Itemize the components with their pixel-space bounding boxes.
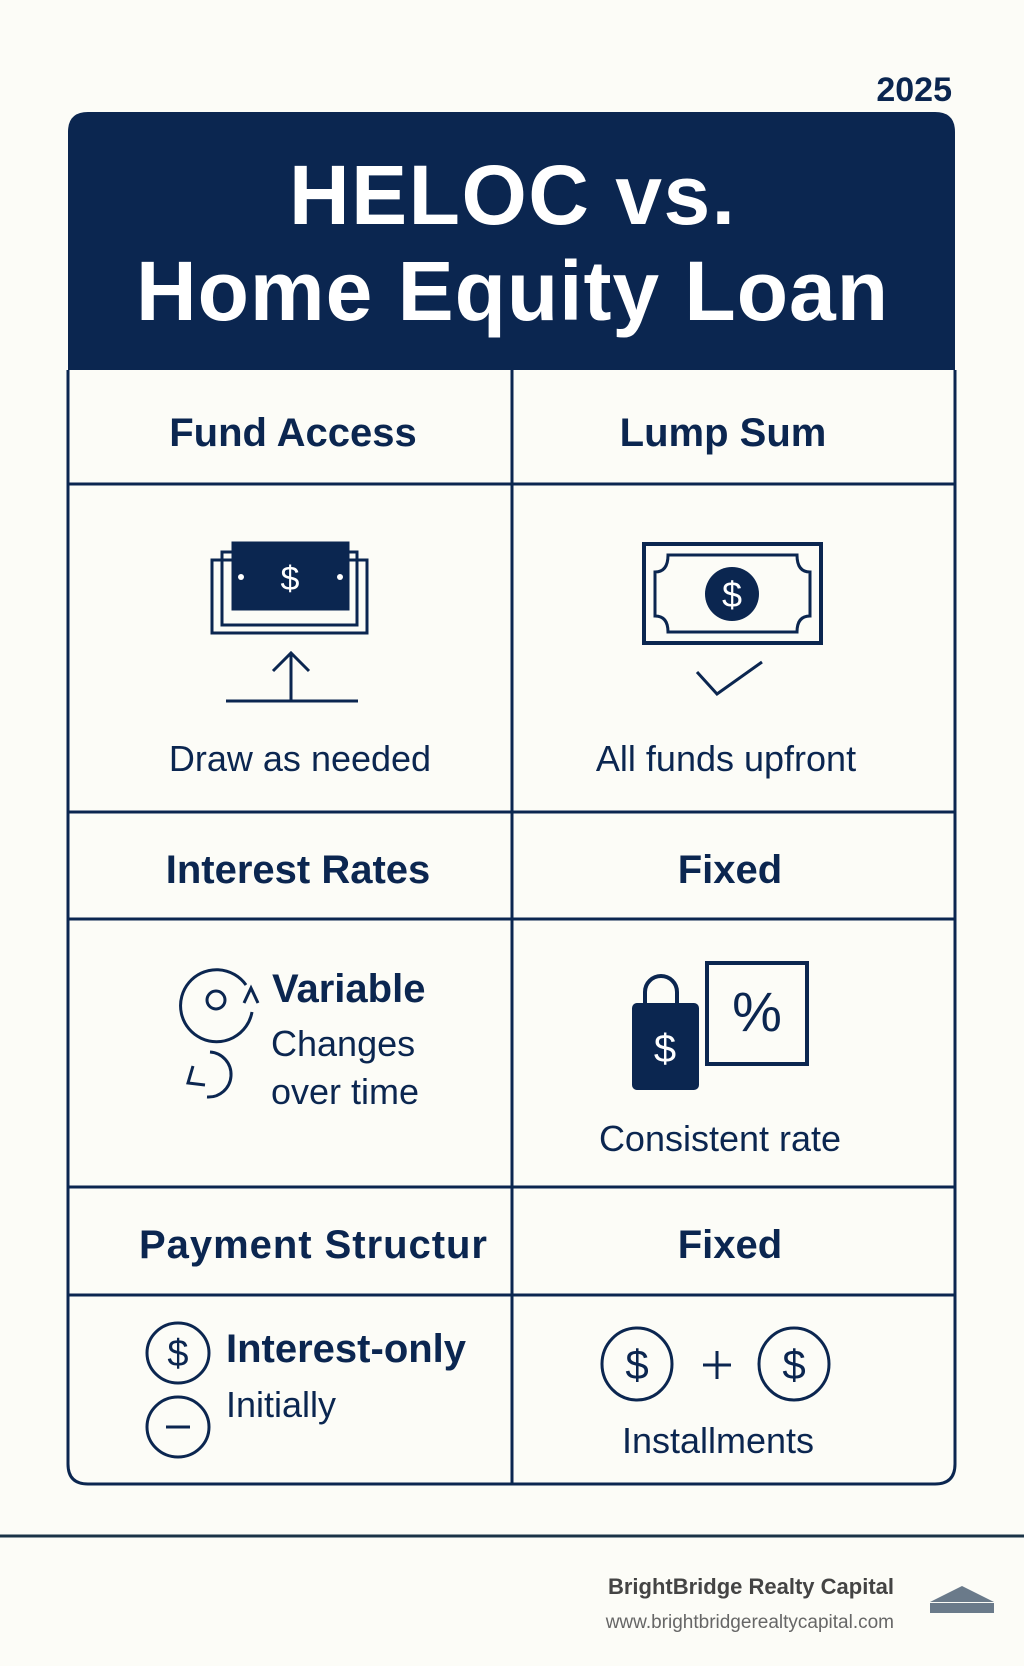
row header: fixed payments: Fixed xyxy=(678,1223,782,1267)
row header: fund access: Fund Access xyxy=(169,411,417,455)
icon: lock and percent: $ xyxy=(654,1027,676,1071)
row header: fixed: Fixed xyxy=(678,848,782,892)
icon: dollar and minus circles: $ xyxy=(167,1333,189,1375)
text: all funds upfront: All funds upfront xyxy=(596,738,856,779)
text: interest-only initially xyxy=(226,1327,467,1425)
icon: dollar plus dollar: $ xyxy=(782,1341,806,1388)
text: interest-only initially: Initially xyxy=(226,1384,336,1425)
icon: stacked bills with up arrow xyxy=(212,543,367,701)
text: installments: Installments xyxy=(622,1420,814,1461)
year label: 2025 xyxy=(876,71,952,109)
icon: lock and percent xyxy=(632,963,807,1090)
text: variable changes over time: Variable xyxy=(272,967,425,1011)
row header: lump sum: Lump Sum xyxy=(620,411,826,455)
text: variable changes over time: Changes xyxy=(271,1023,415,1064)
title: HELOC vs. xyxy=(289,148,735,242)
icon: single bill with check xyxy=(644,544,821,694)
icon: dollar and minus circles xyxy=(147,1323,209,1457)
logo xyxy=(930,1586,994,1613)
text: variable changes over time xyxy=(271,967,425,1112)
icon: single bill with check: $ xyxy=(722,574,742,615)
header banner: Home Equity Loan xyxy=(136,244,888,338)
row header: interest rates: Interest Rates xyxy=(166,848,430,892)
icon: lock and percent: % xyxy=(732,980,782,1043)
text: interest-only initially: Interest-only xyxy=(226,1327,467,1371)
icon: variable cycle xyxy=(181,970,258,1097)
text: variable changes over time: over time xyxy=(271,1071,419,1112)
icon: stacked bills with up arrow: $ xyxy=(281,560,300,598)
text: consistent rate: Consistent rate xyxy=(599,1118,841,1159)
row header: payment structure: Payment Structur xyxy=(139,1223,487,1267)
text: draw as needed: Draw as needed xyxy=(169,738,431,779)
footer: company name: BrightBridge Realty Capital xyxy=(608,1574,894,1599)
header banner xyxy=(68,112,955,370)
footer: url: www.brightbridgerealtycapital.com xyxy=(605,1612,894,1633)
icon: dollar plus dollar: $ xyxy=(625,1341,649,1388)
card: comparison table xyxy=(68,112,955,1484)
icon: dollar plus dollar xyxy=(602,1328,829,1400)
